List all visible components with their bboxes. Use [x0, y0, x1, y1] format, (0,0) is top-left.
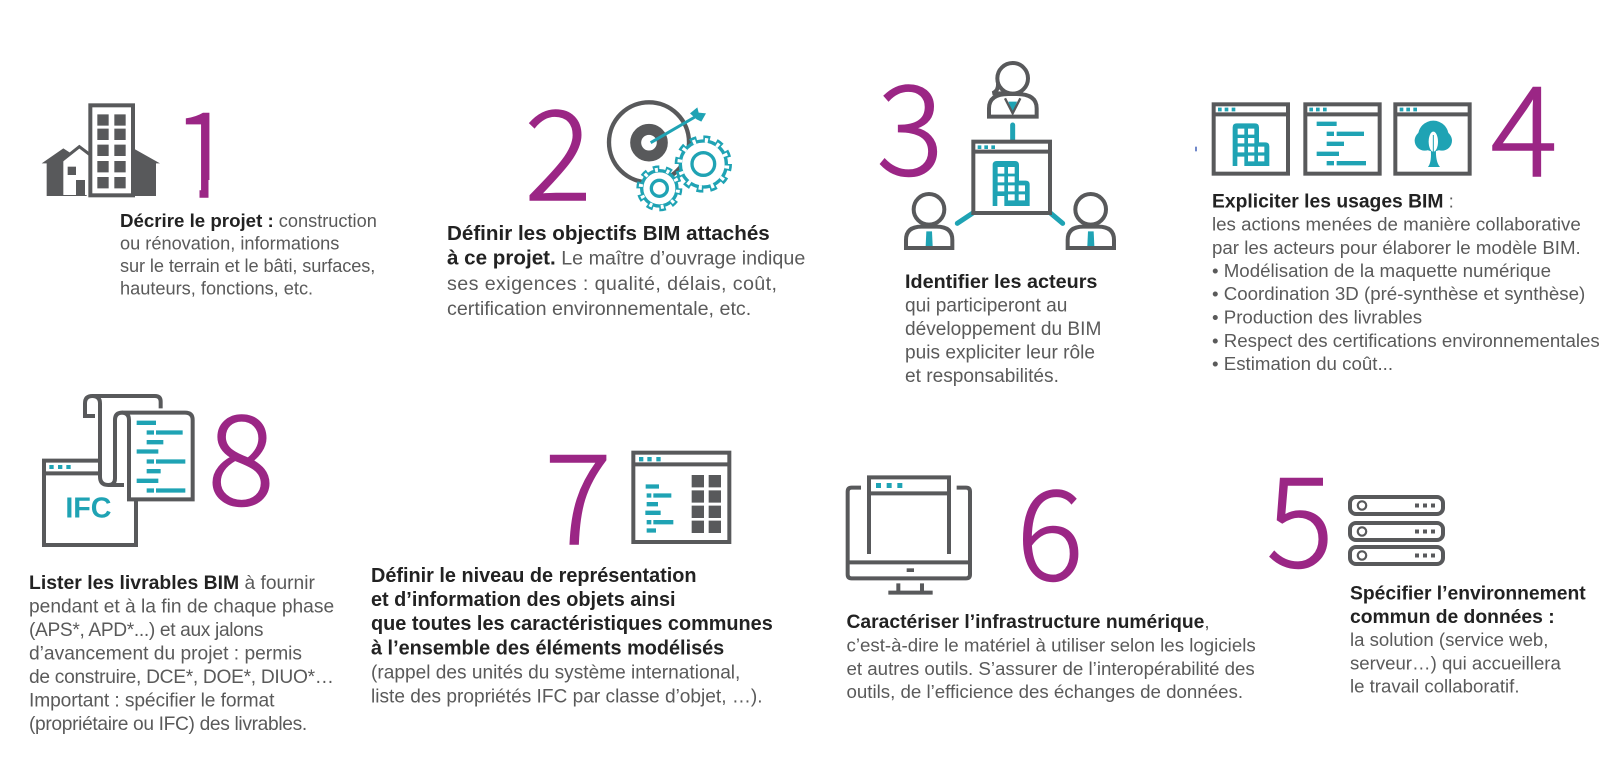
number 2: 2: [525, 55, 591, 236]
description text: Caractériser l’infrastructure numérique: [846, 612, 1205, 633]
description text: la solution (service web,: [1350, 629, 1548, 650]
description text: Lister les livrables BIM: [29, 572, 239, 594]
description text: à fournir: [239, 573, 315, 594]
description text: liste des propriétés IFC par classe d’objet, …).: [371, 686, 763, 708]
icon: server stack: [1350, 497, 1443, 564]
description text: le travail collaboratif.: [1350, 676, 1520, 696]
description text with bullet list: • Modélisation de la maquette numérique: [1212, 260, 1551, 281]
number 5: 5: [1267, 422, 1333, 603]
description text: pendant et à la fin de chaque phase: [29, 596, 334, 618]
description text with bullet list: • Estimation du coût...: [1212, 353, 1393, 374]
description text: Définir le niveau de représentation: [371, 565, 697, 587]
description text: Décrire le projet :: [120, 210, 274, 231]
description text: d’avancement du projet : permis: [29, 644, 302, 664]
panel: step 8 list deliverables: [29, 360, 334, 735]
panel: step 7 level of representation: [371, 399, 773, 708]
description text: Le maître d’ouvrage indique: [556, 248, 805, 270]
description text with bullet list: les actions menées de manière collaborative: [1212, 214, 1581, 234]
description text: c’est-à-dire le matériel à utiliser selon les logiciels: [846, 634, 1256, 656]
number 3: 3: [877, 30, 943, 211]
number 1: 1: [171, 60, 235, 231]
description text: Spécifier l’environnement: [1350, 584, 1586, 604]
description text with bullet list: • Production des livrables: [1212, 306, 1422, 328]
description text: ses exigences : qualité, délais, coût,: [447, 273, 777, 295]
description text: serveur…) qui accueillera: [1350, 652, 1561, 674]
panel: step 5 common data environment: [1267, 422, 1586, 696]
number 4: 4: [1491, 31, 1557, 212]
description text: (APS*, APD*...) et aux jalons: [29, 620, 263, 641]
panel: step 2 define BIM objectives: [447, 55, 805, 320]
description text: commun de données :: [1350, 607, 1555, 628]
description text: sur le terrain et le bâti, surfaces,: [120, 256, 375, 276]
description text: (propriétaire ou IFC) des livrables.: [29, 714, 307, 735]
number 7: 7: [545, 399, 611, 580]
description text: et d’information des objets ainsi: [371, 589, 676, 611]
description text: Identifier les acteurs: [905, 271, 1097, 293]
description text: à ce projet.: [447, 246, 556, 270]
description text with bullet list: • Respect des certifications environnementales: [1212, 330, 1600, 351]
description text: que toutes les caractéristiques communes: [371, 613, 773, 635]
description text: Définir les objectifs BIM attachés: [447, 222, 770, 245]
description text with bullet list: Expliciter les usages BIM: [1212, 192, 1443, 212]
description text: Important : spécifier le format: [29, 690, 275, 712]
description text: à l’ensemble des éléments modélisés: [371, 638, 724, 660]
panel: step 1 describe the project: [42, 60, 377, 298]
description text: et autres outils. S’assurer de l’interopérabilité des: [846, 658, 1255, 679]
panel: step 6 digital infrastructure: [846, 435, 1256, 702]
description text: qui participeront au: [905, 296, 1067, 316]
panel: step 3 identify actors: [877, 30, 1114, 387]
icon: actors around a project window: [906, 63, 1114, 248]
description text: hauteurs, fonctions, etc.: [120, 278, 313, 298]
number 8: 8: [208, 360, 274, 541]
description text: puis expliciter leur rôle: [905, 342, 1095, 364]
icon: three windows: [1195, 104, 1470, 174]
description text with bullet list: • Coordination 3D (pré-synthèse et synthèse): [1212, 283, 1585, 304]
description text: certification environnementale, etc.: [447, 298, 751, 320]
icon: window with list and grid: [633, 453, 729, 542]
number 6: 6: [1017, 435, 1083, 616]
description text with bullet list: par les acteurs pour élaborer le modèle BIM.: [1212, 237, 1581, 258]
icon: documents and IFC window: [44, 396, 193, 545]
description text: de construire, DCE*, DOE*, DIUO*…: [29, 667, 334, 688]
icon: documents and IFC window: IFC: [65, 493, 112, 525]
description text with bullet list: :: [1443, 190, 1454, 212]
icon: target and gears: [609, 102, 729, 208]
description text: et responsabilités.: [905, 366, 1059, 387]
icon: buildings: [42, 105, 160, 196]
panel: step 4 BIM uses: [1195, 31, 1600, 374]
description text: outils, de l’efficience des échanges de données.: [846, 681, 1243, 702]
icon: monitor with window: [848, 477, 970, 593]
description text: ou rénovation, informations: [120, 234, 339, 254]
description text: ,: [1204, 611, 1210, 632]
description text: (rappel des unités du système international,: [371, 662, 740, 684]
description text: développement du BIM: [905, 319, 1101, 340]
description text: construction: [274, 211, 377, 231]
